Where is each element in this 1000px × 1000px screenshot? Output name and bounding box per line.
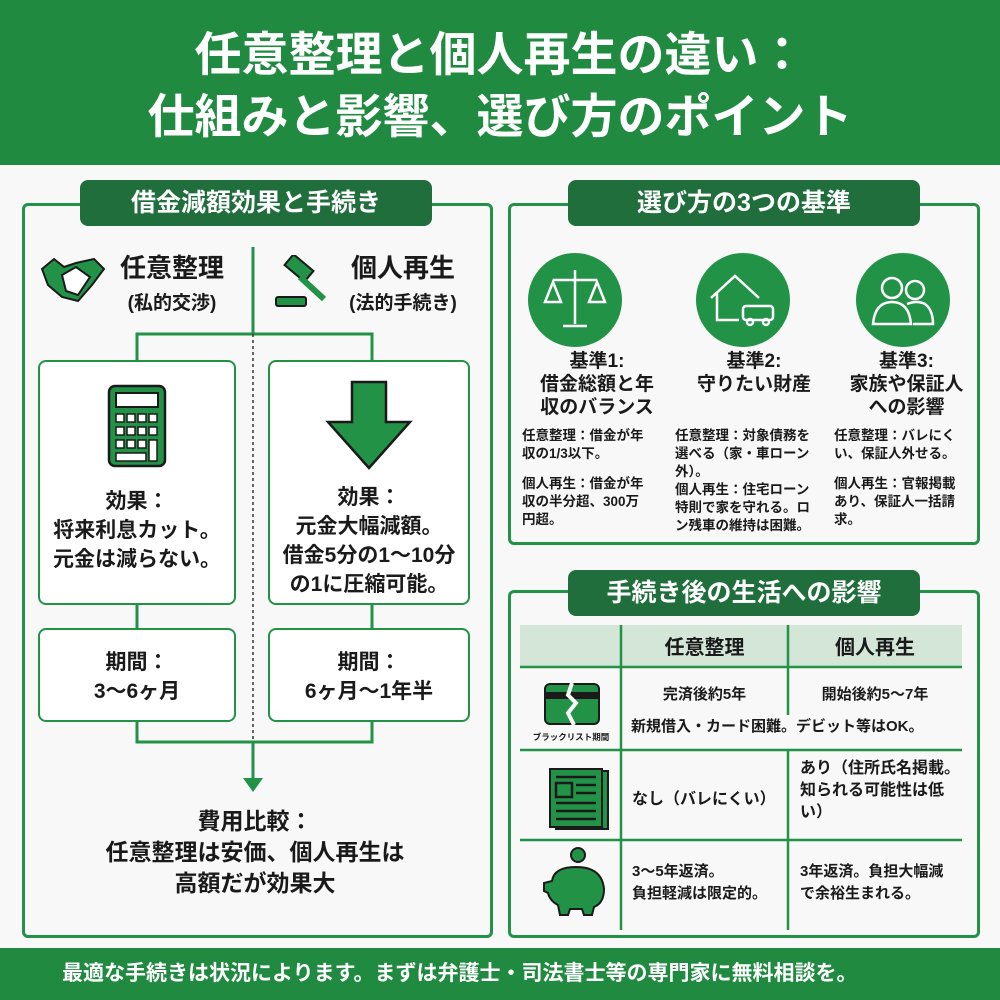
heading: nin-i seiri [120,253,224,314]
text: criterion 1: 借金総額と年 [540,374,654,395]
table: impact comparison: 負担軽減は限定的。 [632,885,767,902]
table: impact comparison: 3～5年返済。 [632,863,724,880]
box: period kojin: 期間： [338,651,400,674]
box: effect kojin: 元金大幅減額。 [296,515,442,538]
footer banner: 最適な手続きは状況によります。まずは弁護士・司法書士等の専門家に無料相談を。 [62,962,857,985]
table: impact comparison: 完済後約5年 [663,686,746,703]
text: criterion 1: 任意整理：借金が年 [522,428,644,443]
box: effect nin-i: 将来利息カット。 [53,519,221,542]
icon: newspaper [549,768,609,830]
box: period nin-i: 3～6ヶ月 [94,680,180,703]
box: period nin-i [38,628,236,722]
box: effect kojin [268,360,470,605]
icon: broken card [544,683,600,725]
heading: criteria: 選び方の3つの基準 [637,189,851,217]
table: impact comparison: 開始後約5～7年 [822,686,928,703]
heading: life impact [568,570,920,616]
table: impact comparison: で余裕生まれる。 [800,885,920,902]
heading: criteria [568,180,920,226]
title banner: 仕組みと影響、選び方のポイント [148,90,852,143]
box: period kojin [268,628,470,722]
table: impact comparison: なし（バレにくい） [632,791,776,808]
table: impact comparison: あり（住所氏名掲載。知られる可能性は低い） [800,760,960,821]
box: effect kojin: の1に圧縮可能。 [290,573,448,596]
heading: kojin saisei: (法的手続き) [349,293,457,314]
text: criterion 2: 任意整理：対象債務を [675,428,810,443]
text: criterion 2: ン残車の維持は困難。 [675,518,810,533]
heading: kojin saisei: 個人再生 [351,253,455,283]
box: period nin-i: 期間： [106,651,168,674]
text: criterion 1: 個人再生：借金が年 [522,476,644,491]
table: impact comparison: 個人再生 [835,637,915,659]
text: criterion 2: 個人再生：住宅ローン [675,482,809,497]
heading: nin-i seiri: 任意整理 [120,253,224,283]
text: criterion 1: 円超。 [522,512,562,527]
text: criterion 3: あり、保証人一括請 [834,494,955,509]
text: cost comparison: 任意整理は安価、個人再生は [106,839,404,865]
text: criterion 2 [675,350,811,533]
box: effect nin-i [38,360,236,605]
table: impact comparison: 新規借入・カード困難。デビット等はOK。 [631,718,924,735]
text: criterion 2: 選べる（家・車ローン [675,446,809,461]
heading: debt reduction: 借金減額効果と手続き [131,189,381,217]
box: effect nin-i: 元金は減らない。 [53,548,221,571]
text: criterion 2: 基準2: [727,351,781,372]
text: criterion 2: 特則で家を守れる。ロ [675,500,810,515]
text: criterion 3: への影響 [868,397,944,418]
icon: gavel [275,255,326,307]
text: criterion 1: 収の半分超、300万 [522,494,639,509]
text: criterion 3: 任意整理：バレにく [834,428,955,443]
icon: down arrow [325,380,413,470]
text: criterion 1: 収の1/3以下。 [522,446,608,461]
text: criterion 1: 基準1: [570,351,624,372]
icon: piggy bank [543,847,605,916]
panel: criteria [508,203,980,545]
text: criterion 2: 守りたい財産 [697,374,811,395]
footer banner [0,948,1000,1000]
text: cost comparison: 高額だが効果大 [174,870,336,896]
icon: handshake [40,258,106,302]
text: criterion 3: 求。 [834,512,861,527]
text: criterion 3: 個人再生：官報掲載 [834,476,956,491]
text: criterion 1: 収のバランス [540,397,654,418]
icon: scales [528,253,622,347]
heading: nin-i seiri: (私的交渉) [128,293,216,314]
heading: life impact: 手続き後の生活への影響 [606,579,882,607]
icon: house car [696,253,790,347]
table: impact comparison: 任意整理 [664,637,744,659]
text: criterion 1 [522,350,654,527]
heading: debt reduction [80,180,432,226]
panel: life impact [508,590,980,938]
text: criterion 3: 家族や保証人 [849,374,964,395]
icon: calculator [108,384,166,468]
box: effect kojin: 効果： [338,486,400,509]
table: impact comparison: ブラックリスト期間 [533,732,609,742]
box: effect nin-i: 効果： [106,490,168,513]
text: cost comparison [106,808,404,896]
flow lines [136,247,374,792]
panel: debt reduction [22,203,493,938]
text: criterion 3: 基準3: [879,351,934,372]
table: impact comparison [520,625,962,930]
text: criterion 3 [834,350,964,527]
text: criterion 3: い、保証人外せる。 [834,446,956,461]
title banner: 任意整理と個人再生の違い： [194,28,806,81]
title banner [0,0,1000,165]
heading: kojin saisei [349,253,457,314]
text: criterion 2: 外）。 [675,464,709,479]
box: effect kojin: 借金5分の1～10分 [283,544,455,567]
icon: people [856,253,950,347]
text: cost comparison: 費用比較： [198,808,312,834]
box: period kojin: 6ヶ月～1年半 [305,680,433,703]
table: impact comparison: 3年返済。負担大幅減 [800,863,943,880]
